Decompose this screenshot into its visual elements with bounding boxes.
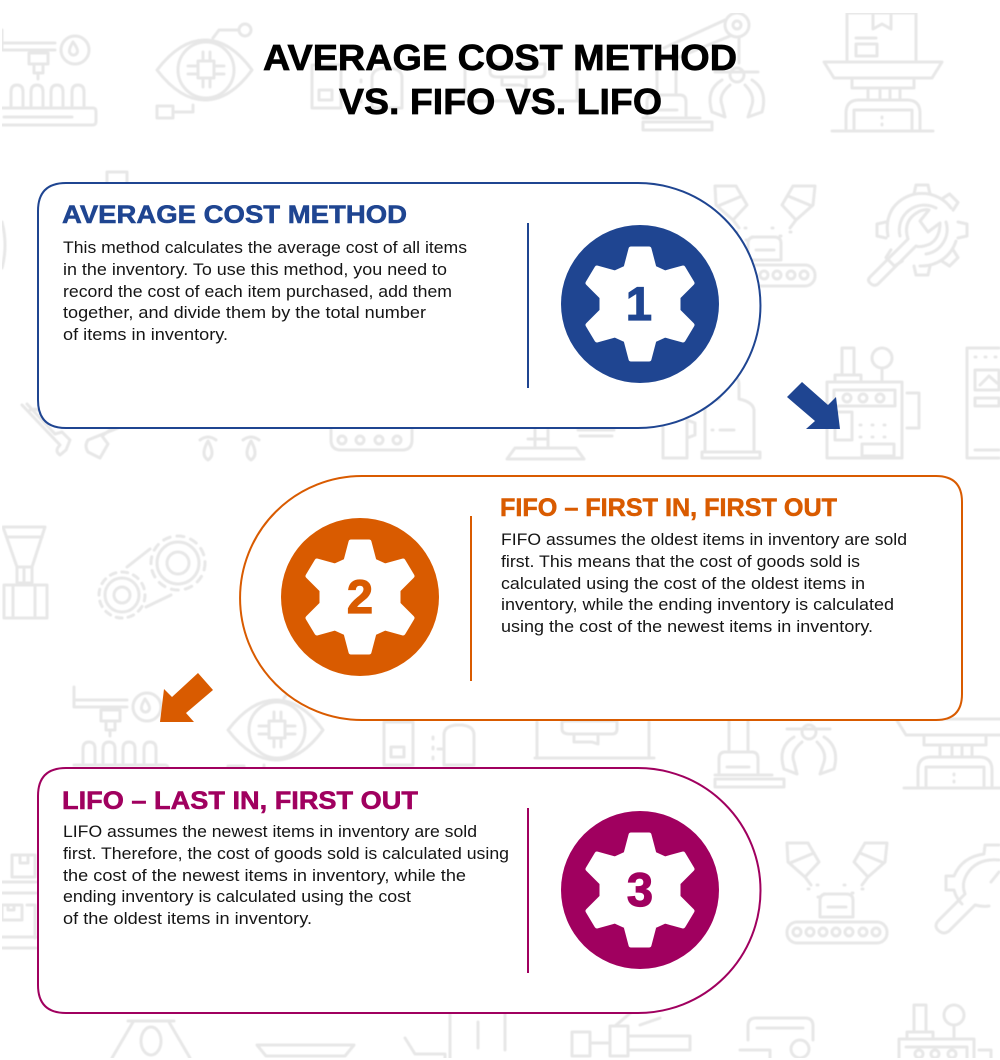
icon: robot arm bbox=[643, 13, 764, 130]
icon: hanging drops bbox=[200, 437, 259, 460]
icon: parcel on press bbox=[824, 13, 942, 131]
icon: eye repeat bbox=[228, 684, 323, 778]
icon: machine at bottom bbox=[740, 1018, 813, 1058]
icon: short conveyor bbox=[331, 430, 412, 450]
icon: valve assembly at bottom bbox=[572, 1005, 690, 1056]
icon: dispenser repeat bbox=[74, 687, 168, 782]
description text bbox=[63, 822, 509, 928]
card outline bbox=[38, 768, 760, 1013]
panel: average cost method bbox=[38, 183, 760, 428]
description text: This method calculates the average cost of all items bbox=[63, 238, 467, 257]
icon: numbered gear 3 bbox=[561, 811, 719, 969]
heading: LIFO – LAST IN, FIRST OUT bbox=[62, 787, 418, 815]
icon: vision eye bbox=[157, 24, 252, 118]
icon: control panel at bottom bbox=[899, 1005, 991, 1058]
description text: of items in inventory. bbox=[63, 325, 228, 344]
icon: wrench pair under card one bbox=[22, 404, 118, 458]
icon: numbered gear 2 bbox=[281, 518, 439, 676]
icon: lift at bottom bbox=[112, 1021, 190, 1058]
description text: LIFO assumes the newest items in inventory are sold bbox=[63, 822, 477, 841]
heading: FIFO – FIRST IN, FIRST OUT bbox=[500, 494, 837, 522]
title bbox=[263, 37, 737, 122]
card outline bbox=[38, 183, 760, 428]
description text: first. This means that the cost of goods sold is bbox=[501, 552, 860, 571]
arrow: card one to card two bbox=[787, 382, 840, 429]
description text: FIFO assumes the oldest items in inventory are sold bbox=[501, 530, 907, 549]
icon: tool stand at bottom bbox=[405, 1014, 505, 1058]
arrow: card two to card three bbox=[160, 673, 213, 722]
title: VS. FIFO VS. LIFO bbox=[339, 81, 662, 122]
icon: monitor behind title bbox=[463, 64, 582, 101]
description text: inventory, while the ending inventory is calculated bbox=[501, 595, 894, 614]
icon: screen right edge bbox=[967, 348, 999, 458]
icon: press repeat bbox=[896, 719, 1000, 788]
description text: using the cost of the newest items in inventory. bbox=[501, 617, 873, 636]
icon: numbered gear 1 bbox=[561, 225, 719, 383]
icon: spray conveyor repeat bbox=[787, 843, 887, 943]
description text: in the inventory. To use this method, you need to bbox=[63, 260, 447, 279]
description text: first. Therefore, the cost of goods sold is calculated using bbox=[63, 844, 509, 863]
vertical divider bbox=[527, 808, 529, 973]
title: AVERAGE COST METHOD bbox=[263, 37, 737, 78]
icon: bottle machine bbox=[663, 375, 760, 458]
icon: spray conveyor bbox=[715, 186, 815, 286]
description text: ending inventory is calculated using the cost bbox=[63, 887, 411, 906]
panel: FIFO bbox=[240, 476, 962, 720]
heading: AVERAGE COST METHOD bbox=[62, 201, 407, 229]
icon: numbered gear 2: 2 bbox=[347, 570, 373, 623]
vertical divider bbox=[527, 223, 529, 388]
icon: numbered gear 1: 1 bbox=[626, 277, 652, 330]
icon: tray at bottom bbox=[257, 1045, 354, 1056]
description text: of the oldest items in inventory. bbox=[63, 909, 312, 928]
icon: robot arm repeat bbox=[715, 670, 836, 787]
icon: monitor repeat bbox=[535, 721, 654, 758]
description text: together, and divide them by the total number bbox=[63, 303, 426, 322]
description text: record the cost of each item purchased, add them bbox=[63, 282, 452, 301]
icon: dispenser top left bbox=[2, 30, 96, 125]
icon: monitor stand bbox=[507, 430, 614, 459]
icon: funnel hopper bbox=[3, 527, 47, 618]
card outline bbox=[240, 476, 962, 720]
icon: numbered gear 3: 3 bbox=[627, 863, 653, 916]
icon: control panel bbox=[827, 348, 919, 458]
panel: LIFO bbox=[38, 768, 760, 1013]
icon: electronics box repeat bbox=[384, 722, 474, 765]
icon: parcel on press left edge bbox=[2, 855, 36, 948]
icon: linked gears bbox=[99, 536, 205, 618]
description text: the cost of the newest items in inventory, while the bbox=[63, 866, 466, 885]
icon: small square above card one bbox=[107, 172, 127, 182]
description text bbox=[501, 530, 907, 636]
icon: electronics box bbox=[312, 65, 402, 108]
icon: eye left edge bbox=[2, 222, 5, 268]
icon: wrench gear right edge bbox=[936, 845, 999, 933]
description text bbox=[63, 238, 467, 344]
vertical divider bbox=[470, 516, 472, 681]
icon: wrench gear bbox=[868, 185, 967, 285]
description text: calculated using the cost of the oldest items in bbox=[501, 574, 865, 593]
